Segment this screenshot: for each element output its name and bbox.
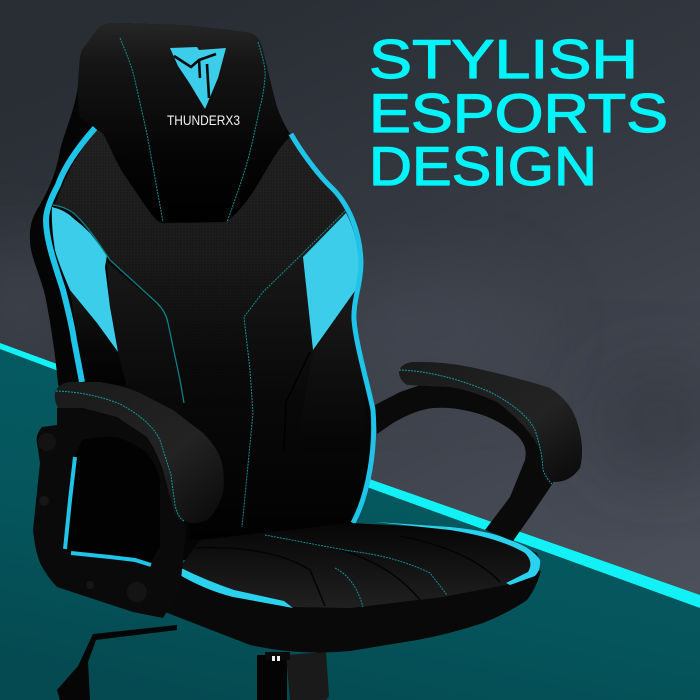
frame cyan vertical piping	[65, 457, 75, 549]
left back stitching	[53, 205, 184, 403]
lower right seam	[284, 352, 310, 450]
seat front-left cyan piping	[178, 568, 293, 608]
title: stylish esports design: ESPORTS	[369, 82, 668, 144]
right cyan panel	[303, 213, 359, 350]
lower right mesh panel	[296, 290, 366, 450]
headrest	[78, 23, 289, 223]
backrest silhouette	[30, 23, 375, 560]
frame knobs	[38, 433, 56, 451]
lower right inner panel	[244, 256, 375, 530]
right back stitching	[242, 211, 345, 527]
seat rear stitching	[265, 535, 447, 595]
logo wordmark: THUNDERX3	[167, 112, 240, 128]
chair base and gas lift	[57, 625, 329, 700]
title: stylish esports design	[369, 28, 668, 197]
lower left inner panel	[107, 262, 183, 540]
left cyan panel	[52, 207, 118, 352]
teal floor	[0, 345, 700, 700]
logo shield mark	[170, 47, 226, 109]
chair backrest	[30, 23, 375, 560]
height adjust knob	[286, 652, 329, 700]
headrest left stitching	[120, 38, 163, 222]
frame cyan horizontal piping	[71, 553, 151, 565]
frame opening	[63, 437, 160, 563]
seat right cyan piping	[375, 522, 540, 585]
lower left side panel	[70, 290, 135, 385]
base bracket and lever	[57, 625, 177, 700]
right cyan piping	[291, 134, 374, 523]
left arm pad	[55, 382, 224, 523]
right arm pad stitching	[399, 370, 552, 484]
left cyan piping	[46, 128, 95, 382]
right armrest	[375, 362, 582, 541]
mechanism glints	[265, 652, 290, 660]
left arm pad stitching	[56, 391, 184, 521]
left arm frame	[33, 405, 186, 618]
seat	[165, 522, 541, 653]
right arm support	[375, 375, 560, 541]
seat front stitching	[335, 568, 363, 607]
title: stylish esports design: DESIGN	[369, 135, 597, 197]
seat cushion	[178, 523, 540, 608]
seat base shell	[165, 570, 541, 653]
ThunderX3 logo	[167, 47, 240, 128]
seat seam shading	[195, 536, 500, 606]
central back panel	[55, 130, 361, 540]
right arm pad	[399, 362, 582, 482]
neon cyan diagonal stripe	[0, 343, 700, 608]
headrest right stitching	[227, 42, 265, 222]
left armrest	[33, 382, 224, 618]
gas lift cylinder	[257, 655, 287, 700]
title: stylish esports design: STYLISH	[369, 28, 638, 90]
